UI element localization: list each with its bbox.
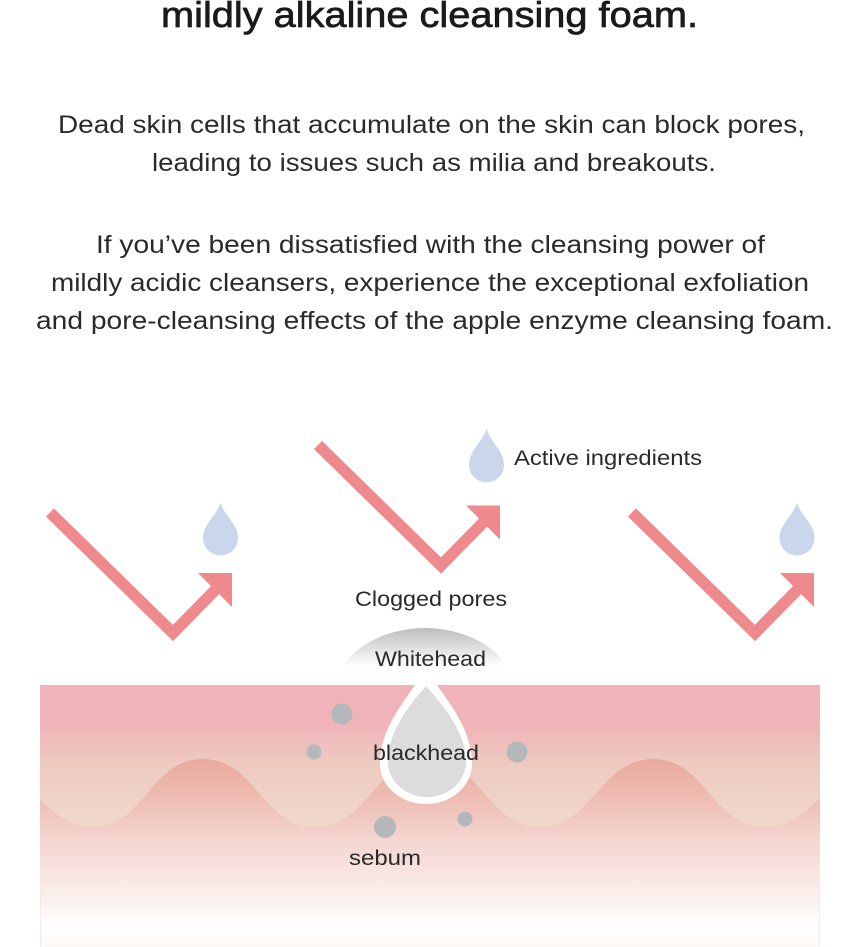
panel: skin cross-section <box>40 685 820 947</box>
text block: cleansing power: If you’ve been dissatisfied with the cleansing power of <box>96 231 765 259</box>
text block: dead skin cells <box>58 111 805 177</box>
label: clogged pores: Clogged pores <box>355 588 507 611</box>
text block: dead skin cells: leading to issues such as milia and breakouts. <box>152 149 716 177</box>
text block: cleansing power <box>36 231 833 335</box>
sebum dots <box>306 704 528 838</box>
arrow: left <box>50 512 232 633</box>
text block: cleansing power: mildly acidic cleansers, experience the exceptional exfoliation <box>51 269 809 297</box>
skin wave layer <box>40 759 820 947</box>
label: sebum: sebum <box>349 847 421 870</box>
pore fill <box>388 686 466 797</box>
text block: dead skin cells: Dead skin cells that accumulate on the skin can block pores, <box>58 111 805 139</box>
label: active ingredients: Active ingredients <box>514 447 702 470</box>
skin upper layer <box>40 685 820 947</box>
icon: left drop <box>203 502 238 556</box>
whitehead dome <box>343 628 507 666</box>
arrow: middle <box>318 445 500 566</box>
pore outline <box>380 685 472 804</box>
label: whitehead: Whitehead <box>375 648 486 671</box>
icon: middle drop <box>469 428 504 482</box>
icon: right drop <box>780 502 814 556</box>
panel edge lines <box>40 890 820 947</box>
label: blackhead: blackhead <box>373 742 479 765</box>
text block: cleansing power: and pore-cleansing effects of the apple enzyme cleansing foam. <box>36 307 833 335</box>
arrow: right <box>632 512 814 633</box>
